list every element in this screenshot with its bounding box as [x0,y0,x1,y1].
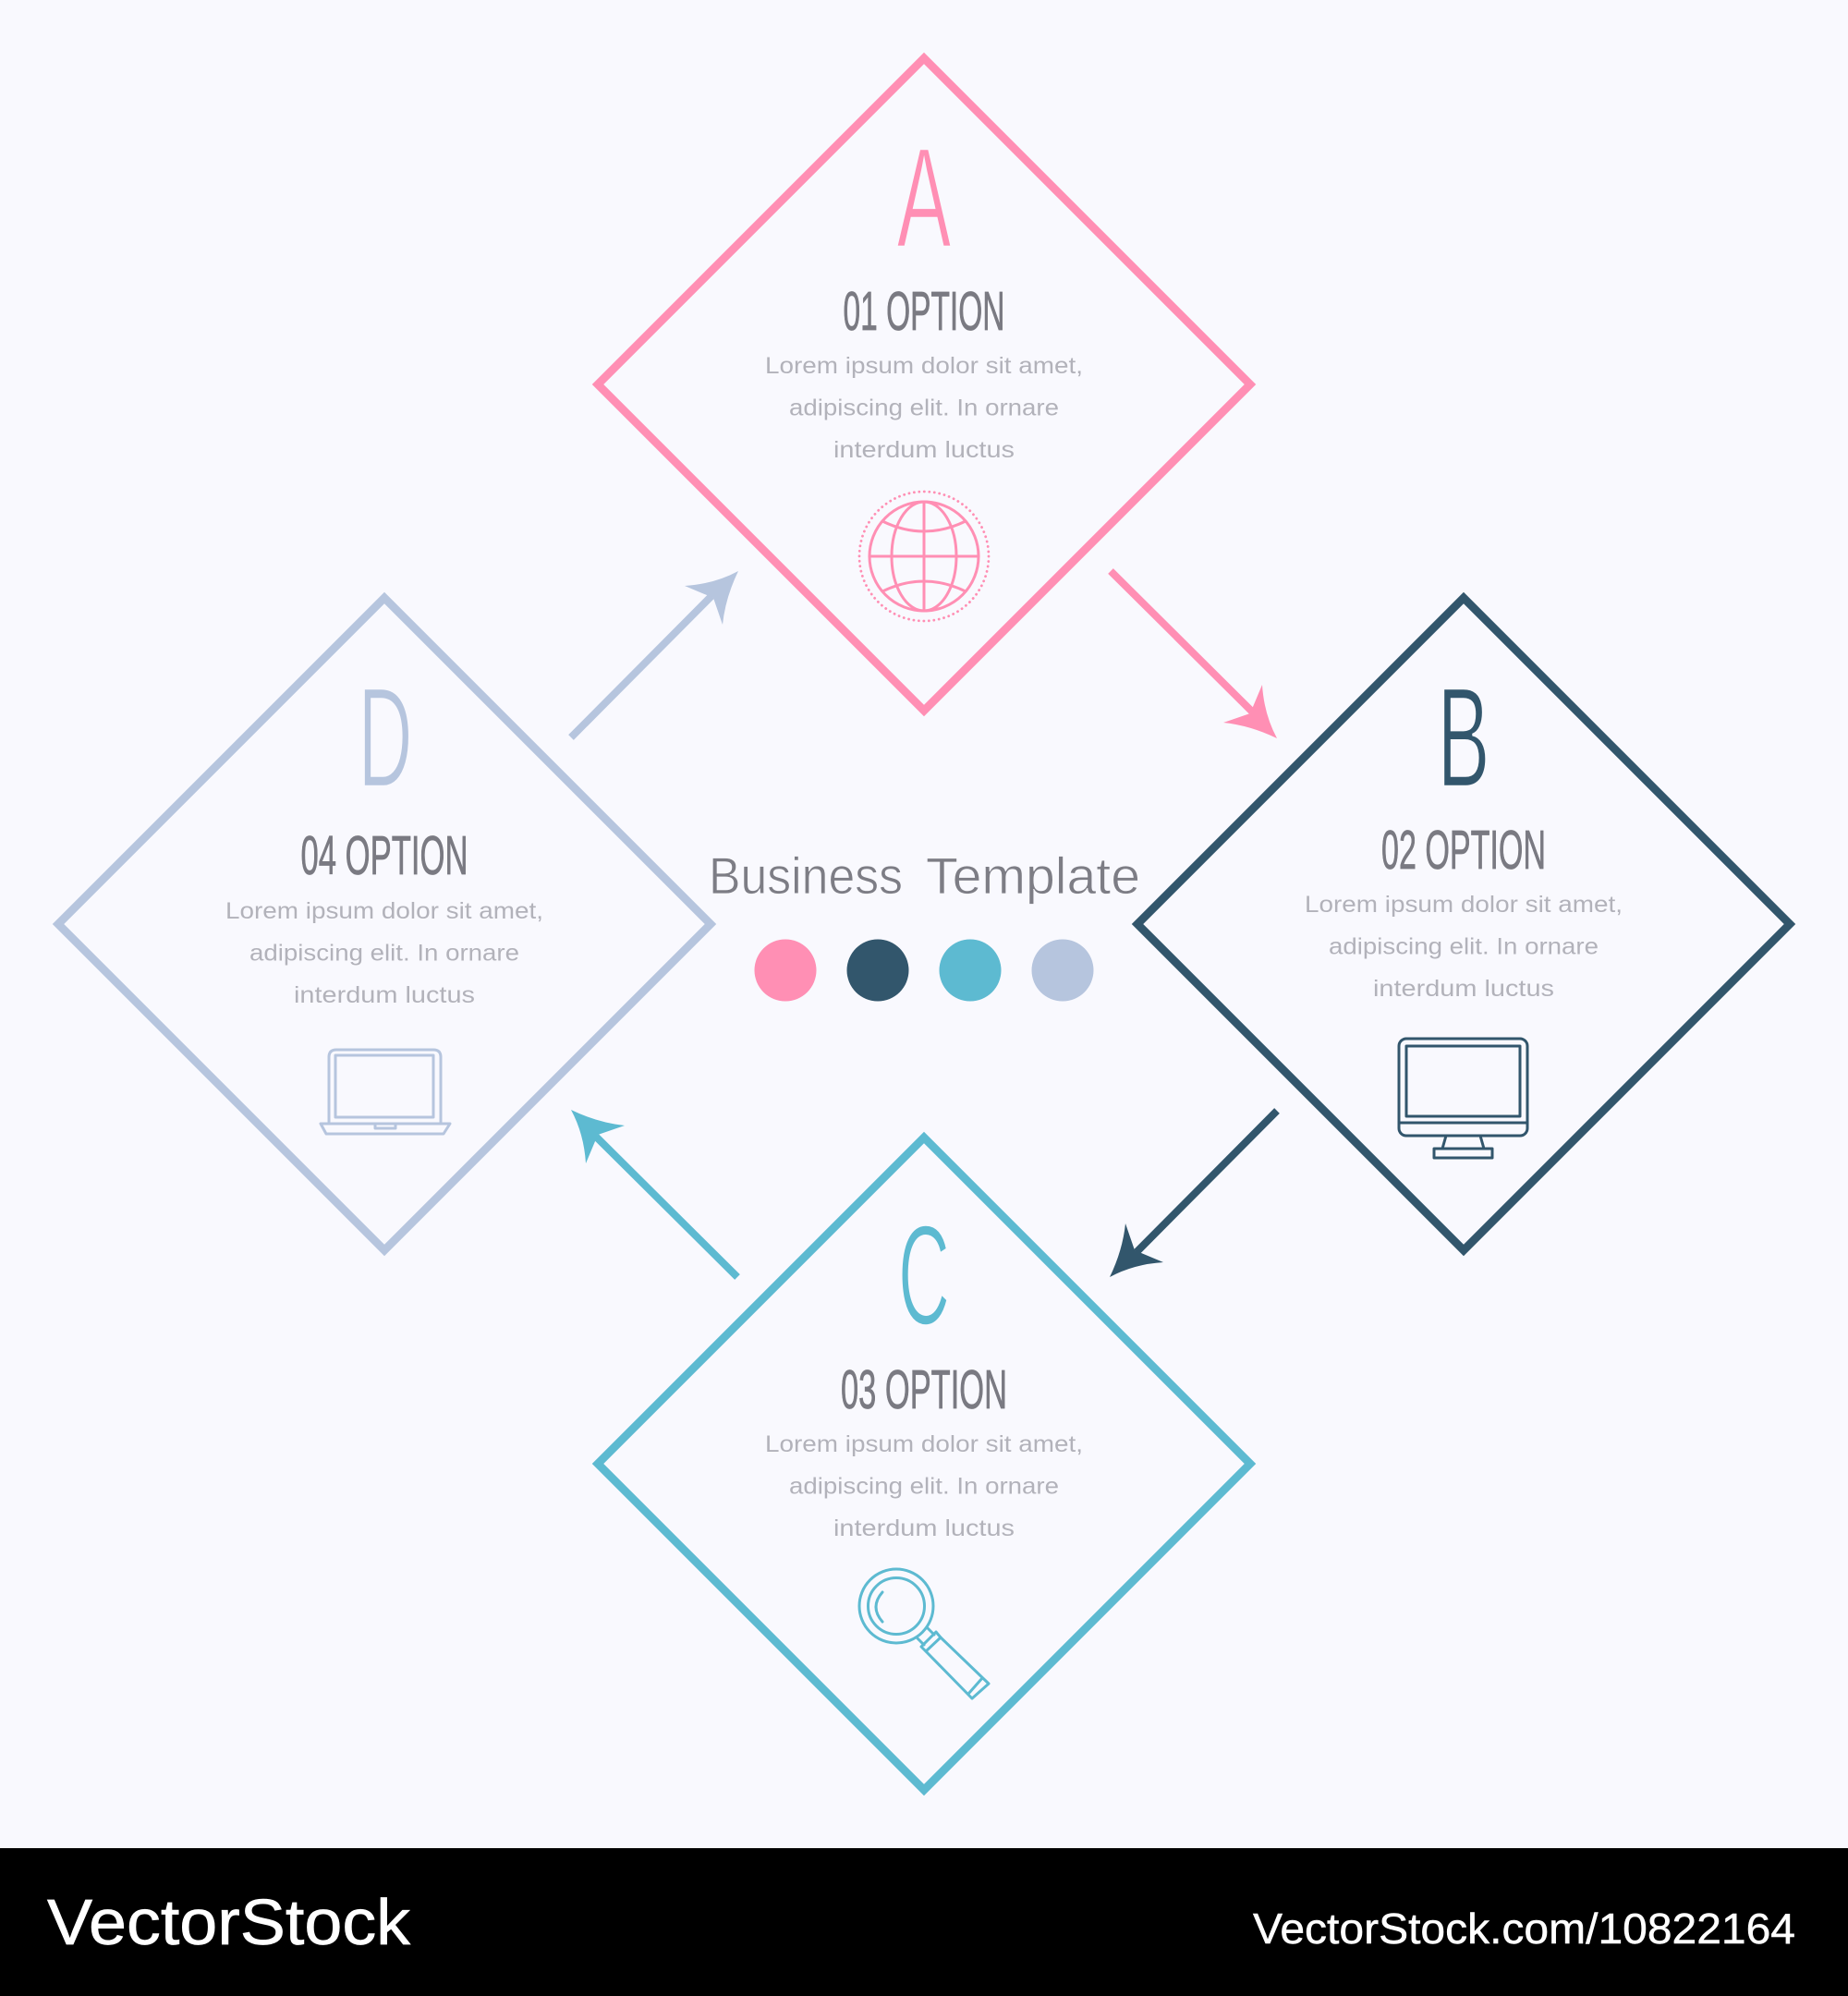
diamond outline A [598,58,1250,711]
arrow: C to D [571,1110,737,1277]
center title [709,846,1140,905]
letter C: C [898,1196,950,1355]
panel A: option 01 [598,58,1250,711]
letter B: B [1438,658,1489,817]
color legend dots [754,939,1094,1002]
letter A: A [896,118,952,277]
icon: globe [859,492,989,621]
body text C: interdum luctus [833,1515,1015,1541]
letter D: D [359,658,412,817]
heading 02 option: 02 OPTION [1381,820,1546,881]
body text D: adipiscing elit. In ornare [249,941,519,967]
body text B [1305,892,1623,1002]
footer band [0,1848,1848,1996]
body text C [765,1431,1083,1541]
heading 01 option: 01 OPTION [843,281,1005,342]
panel D: option 04 [58,598,711,1250]
diamond outline D [58,598,711,1250]
body text C: adipiscing elit. In ornare [789,1473,1059,1499]
heading 04 option: 04 OPTION [301,825,468,886]
heading 03 option: 03 OPTION [841,1359,1007,1420]
center title: Template [926,846,1140,905]
body text D [225,898,543,1008]
arrow: B to C [1110,1111,1277,1277]
body text C: Lorem ipsum dolor sit amet, [765,1431,1083,1457]
arrow: A to B [1111,571,1277,738]
body text D: interdum luctus [294,982,475,1008]
body text B: interdum luctus [1373,976,1554,1002]
arrow: D to A [571,571,738,737]
body text A: interdum luctus [833,437,1015,463]
body text B: adipiscing elit. In ornare [1329,933,1599,959]
diamond outline B [1137,598,1790,1250]
body text A: Lorem ipsum dolor sit amet, [765,353,1083,379]
icon: desktop monitor [1399,1039,1527,1158]
icon: magnifying glass [859,1569,989,1698]
diamond outline C [598,1138,1250,1790]
panel C: option 03 [598,1138,1250,1790]
center title: Business [709,846,903,905]
body text B: Lorem ipsum dolor sit amet, [1305,892,1623,918]
body text D: Lorem ipsum dolor sit amet, [225,898,543,924]
body text A [765,353,1083,463]
icon: laptop [321,1050,450,1134]
body text A: adipiscing elit. In ornare [789,396,1059,421]
footer url: VectorStock.com/10822164 [1253,1905,1795,1953]
footer logo: VectorStock [47,1886,411,1958]
panel B: option 02 [1137,598,1790,1250]
